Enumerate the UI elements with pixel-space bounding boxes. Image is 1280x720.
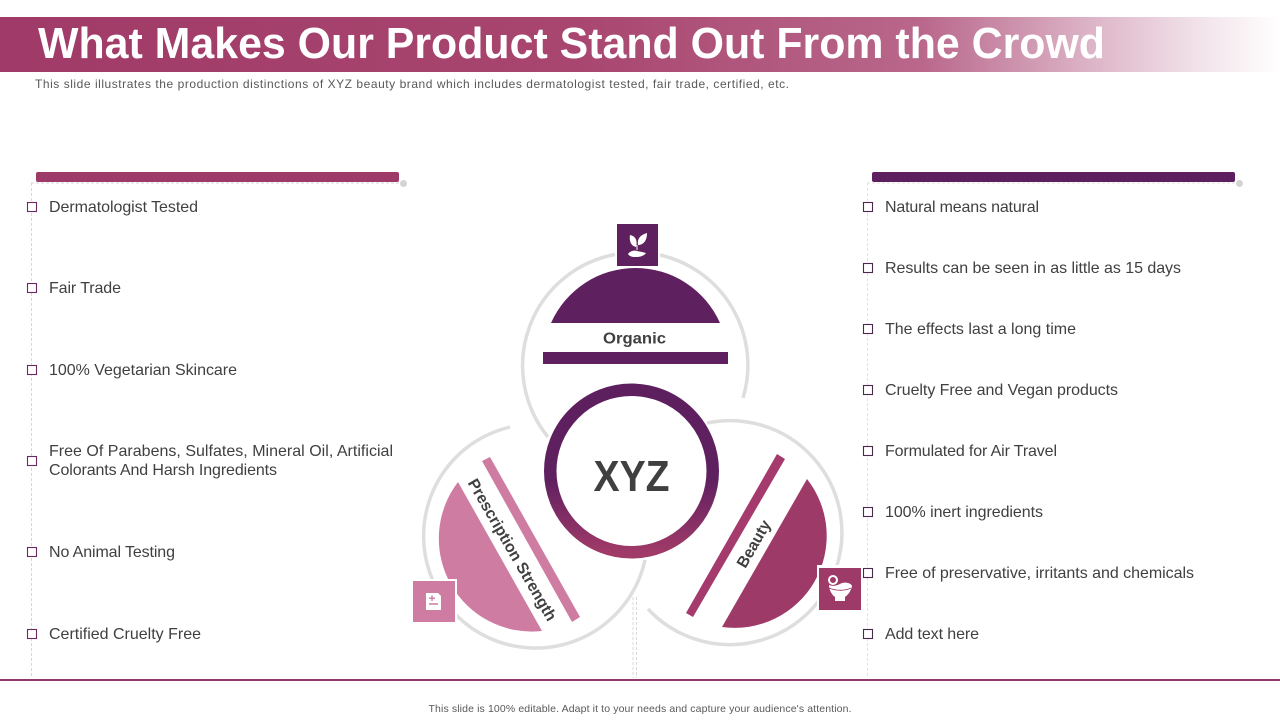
center ring: XYZ xyxy=(550,390,713,552)
center connector lines xyxy=(633,597,636,678)
list item: Air Travel: Formulated for Air Travel xyxy=(885,443,1057,460)
list item: Fair Trade: Fair Trade xyxy=(49,280,121,297)
segment: Beauty xyxy=(648,421,863,645)
list item: No Animal Testing: No Animal Testing xyxy=(49,544,175,561)
subtitle: This slide illustrates the production distinctions of XYZ beauty brand which includes dermatologist tested, fair trade, certified, etc. xyxy=(35,77,789,91)
panel: left list xyxy=(28,172,407,678)
diagram: venn circles xyxy=(412,224,863,648)
title banner xyxy=(0,17,1280,72)
list item: preservative: Free of preservative, irritants and chemicals xyxy=(885,565,1194,582)
list item: Free Of Parabens xyxy=(28,443,393,479)
list item: Vegetarian Skincare: 100% Vegetarian Skincare xyxy=(49,362,237,379)
label: XYZ: XYZ xyxy=(594,452,670,501)
list item: inert: 100% inert ingredients xyxy=(885,504,1043,521)
title: What Makes Our Product Stand Out From the Crowd xyxy=(38,19,1105,68)
list item: Certified Cruelty Free: Certified Cruelty Free xyxy=(49,626,201,643)
segment: Prescription Strength xyxy=(412,427,645,648)
list item: Free Of Parabens: Free Of Parabens, Sulfates, Mineral Oil, Artificial xyxy=(49,443,393,460)
left header bar xyxy=(36,172,399,182)
label: Prescription Strength: Prescription Strength xyxy=(464,476,559,624)
list item: Natural means natural: Natural means natural xyxy=(885,199,1039,216)
list item: Dermatologist Tested: Dermatologist Tested xyxy=(49,199,198,216)
list item: Add text here: Add text here xyxy=(885,626,979,643)
label: Organic: Organic xyxy=(603,330,666,348)
panel: right list xyxy=(864,172,1243,678)
list item: effects: The effects last a long time xyxy=(885,321,1076,338)
icon: bowl with flower xyxy=(817,565,863,611)
right header bar xyxy=(872,172,1235,182)
list item: Results: Results can be seen in as little as 15 days xyxy=(885,260,1181,277)
footer note: This slide is 100% editable. Adapt it to your needs and capture your audience's attention. xyxy=(428,703,852,715)
footer rule xyxy=(0,679,1280,681)
icon: plant in hand xyxy=(617,224,658,266)
list item: Cruelty Free: Cruelty Free and Vegan products xyxy=(885,382,1118,399)
segment: Organic xyxy=(523,224,748,437)
icon: medical document xyxy=(412,579,457,624)
list item: Free Of Parabens: Colorants And Harsh Ingredients xyxy=(49,462,277,479)
label: Beauty: Beauty xyxy=(734,517,775,571)
